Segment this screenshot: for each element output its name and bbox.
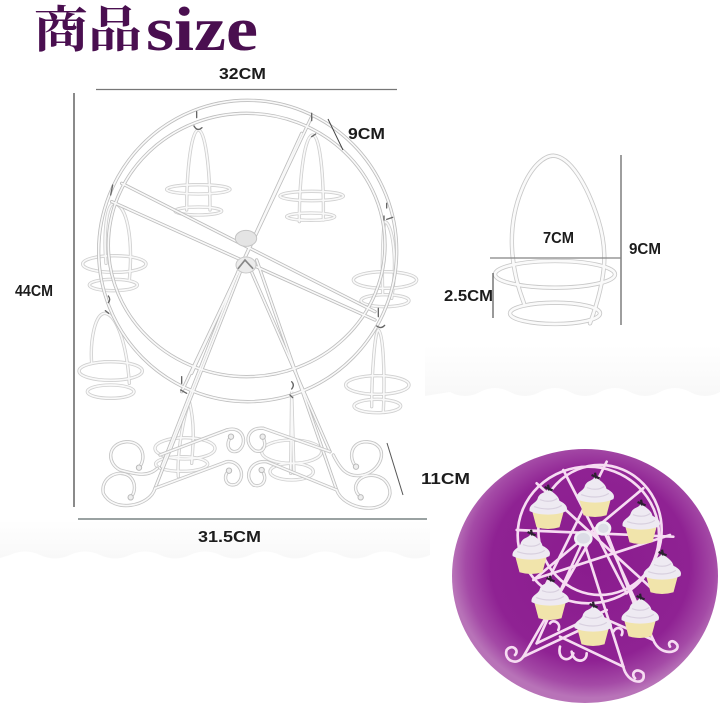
ornate scrolled base [103, 428, 390, 508]
dimension: 9CM ring depth: 9CM [348, 126, 385, 143]
single basket detail drawing [495, 156, 615, 324]
dimension: 31.5CM base width: 31.5CM [198, 529, 261, 546]
central hub [235, 230, 257, 273]
dimension lines on basket [490, 155, 621, 325]
cupcakes [512, 473, 681, 646]
hanger clips [105, 112, 393, 398]
background: faint scalloped shadow band left [0, 520, 430, 558]
purple circle product photo [452, 449, 718, 703]
baskets [79, 130, 417, 480]
white ferris wheel on purple [506, 462, 678, 682]
label: 9CM basket height: 9CM [629, 241, 661, 258]
dimension: 44CM height: 44CM [15, 283, 53, 300]
wheel rings, spokes and legs [99, 100, 397, 490]
label: 7CM: 7CM [543, 230, 574, 247]
main ferris wheel stand line drawing [79, 100, 417, 508]
basket wire [495, 156, 615, 324]
dimension: 11CM base depth: 11CM [421, 471, 470, 488]
dimension: 9CM ring depth [328, 119, 385, 150]
title [34, 0, 258, 64]
dimension: 32CM width: 32CM [219, 66, 266, 83]
purple disc [452, 449, 718, 703]
dimension: 11CM base depth [387, 443, 470, 495]
label: 2.5CM: 2.5CM [444, 288, 493, 305]
background: faint scalloped shadow band right [425, 345, 720, 396]
